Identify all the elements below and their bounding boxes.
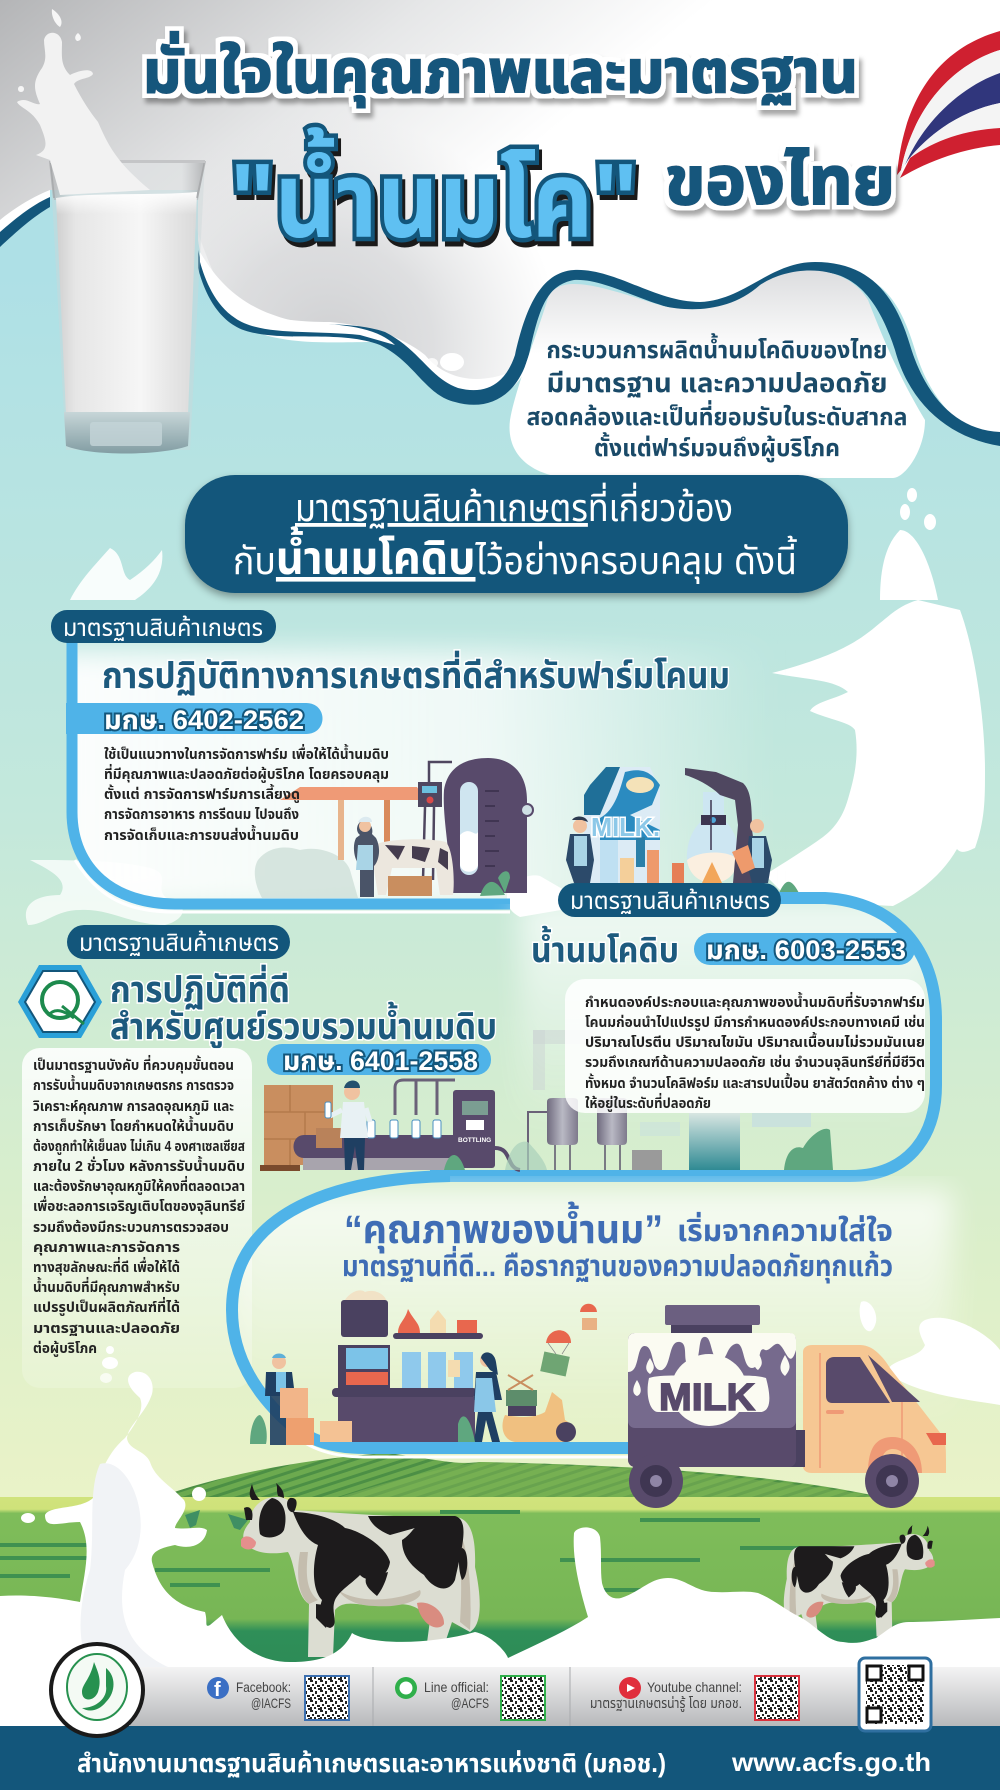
agency seal: [51, 1644, 143, 1736]
background wave: grey top area with white and teal swoosh: [0, 0, 1000, 446]
milk wave over field: [0, 1301, 1000, 1730]
standard code badge: มกษ. 6401-2558: [283, 1046, 478, 1076]
cow: small: [784, 1525, 935, 1637]
facebook contact: @IACFS: [251, 1695, 291, 1711]
description panel: คุณภาพและการจัดการ: [33, 1240, 180, 1256]
description panel: และต้องรักษาอุณหภูมิให้คงที่ตลอดเวลา: [33, 1175, 245, 1196]
heading: น้ำนมโคดิบ: [531, 925, 679, 970]
parachute parcels: [540, 1304, 597, 1376]
footer bar: [0, 1726, 1000, 1790]
agency name: สำนักงานมาตรฐานสินค้าเกษตรและอาหารแห่งชาติ (มกอช.): [77, 1748, 666, 1778]
description panel: มาตรฐานและปลอดภัย: [33, 1321, 180, 1337]
tank: [665, 1305, 760, 1325]
shop worker right: [458, 1352, 502, 1442]
plants: [250, 1415, 267, 1444]
milk splashes behind panels: [26, 488, 985, 925]
illustration: bottling line and plant: BOTTLING: [458, 1137, 491, 1144]
tag: มาตรฐานสินค้าเกษตร: [570, 888, 770, 915]
callout blob: [510, 271, 925, 478]
standard code badge: มกษ. 6402-2562: [104, 705, 304, 735]
illustration: farm and milking tank: MILK.: [591, 812, 660, 842]
description: [104, 743, 389, 844]
description: การจัดการอาหาร การรีดนม ไปจนถึง: [104, 807, 299, 823]
factory worker: [325, 1080, 370, 1170]
lab workers: [566, 816, 772, 883]
website: www.acfs.go.th: [731, 1747, 931, 1777]
description panel: raw milk: ปริมาณโปรตีน ปริมาณไขมัน ปริมาณเนื้อนมไม่รวมมันเนย: [585, 1031, 925, 1051]
description panel: raw milk: [565, 979, 925, 1113]
illustration: milk truck: MILK: [659, 1377, 756, 1419]
milk carton and lab: [584, 767, 660, 883]
illustration: bottling line and plant: [260, 1030, 833, 1171]
line contact: @ACFS: [451, 1695, 489, 1711]
shop worker left: [265, 1354, 352, 1445]
description panel: วิเคราะห์คุณภาพ การลดอุณหภูมิ และ: [33, 1099, 234, 1116]
description panel: raw milk: ทั้งหมด จำนวนโคลิฟอร์ม และสารปนเปื้อน ยาสัตว์ตกค้าง ต่าง ๆ: [585, 1072, 925, 1092]
panel 3: good practice for raw milk collection centres: [18, 925, 833, 1388]
callout text: กระบวนการผลิตน้ำนมโคดิบของไทย: [546, 333, 888, 364]
heading: การปฏิบัติทางการเกษตรที่ดีสำหรับฟาร์มโคนม: [102, 650, 730, 696]
delivery scooter: [502, 1375, 576, 1442]
cows: [241, 1483, 935, 1658]
tag: มาตรฐานสินค้าเกษตร: [63, 615, 263, 642]
title: [143, 31, 895, 260]
description panel: [22, 1048, 252, 1388]
description panel: ทางสุขลักษณะที่ดี เพื่อให้ได้: [33, 1256, 180, 1276]
footer contact strip: [130, 1667, 1000, 1726]
slogan: มาตรฐานที่ดี... คือรากฐานของความปลอดภัยทุกแก้ว: [342, 1245, 893, 1283]
illustration: milk shop: [250, 1290, 597, 1445]
icon: Q mark hexagon: [18, 965, 102, 1038]
distant cows: [185, 1510, 248, 1530]
description panel: การเก็บรักษา โดยกำหนดให้น้ำนมดิบ: [33, 1115, 234, 1135]
slogan: “คุณภาพของน้ำนม”: [344, 1201, 663, 1254]
standard code badge: มกษ. 6003-2553: [706, 935, 906, 965]
description panel: น้ำนมดิบที่มีคุณภาพสำหรับ: [33, 1276, 180, 1296]
facebook contact: Facebook:: [236, 1679, 291, 1695]
tag: มาตรฐานสินค้าเกษตร: [79, 930, 279, 957]
youtube contact: มาตรฐานเกษตรน่ารู้ โดย มกอช.: [590, 1695, 742, 1712]
line contact: [395, 1676, 545, 1720]
cow: large: [241, 1483, 480, 1658]
cab: [803, 1345, 946, 1473]
panel 1: good agricultural practice for dairy farms: [50, 610, 800, 912]
panel 2: raw cow milk standard: [430, 883, 940, 1176]
glass of milk: [17, 9, 205, 454]
title highlight: น้ำนมโค: "น้ำนมโค": [230, 127, 638, 260]
description panel: เพื่อชะลอการเจริญเติบโตของจุลินทรีย์: [33, 1195, 245, 1215]
plants: [480, 871, 800, 896]
illustration: farm and milking tank: [255, 758, 800, 898]
description panel: เป็นมาตรฐานบังคับ ที่ควบคุมขั้นตอน: [33, 1054, 234, 1074]
description panel: ต่อผู้บริโภค: [33, 1340, 97, 1358]
cow in the barn: [361, 839, 454, 895]
heading: [110, 964, 497, 1048]
callout text: สอดคล้องและเป็นที่ยอมรับในระดับสากล: [526, 400, 908, 431]
tanks and building fade: [533, 1030, 593, 1044]
description panel: แปรรูปเป็นผลิตภัณฑ์ที่ได้: [33, 1296, 180, 1317]
description: ที่มีคุณภาพและปลอดภัยต่อผู้บริโภค โดยครอบคลุม: [104, 763, 389, 784]
title line 2 end: ของไทย: ของไทย: [665, 143, 895, 219]
panel 4: quality slogan, shop and milk truck: [232, 1176, 952, 1508]
facebook contact: f: [214, 1679, 221, 1701]
description: ใช้เป็นแนวทางในการจัดการฟาร์ม เพื่อให้ได้น้ำนมดิบ: [104, 743, 389, 763]
callout text: [526, 333, 908, 463]
description panel: raw milk: รวมถึงเกณฑ์ด้านความปลอดภัย เช่น จำนวนจุลินทรีย์ที่มีชีวิต: [585, 1051, 925, 1071]
illustration: milk truck: [628, 1305, 946, 1508]
facebook contact: [207, 1676, 349, 1720]
title line 1: มั่นใจในคุณภาพและมาตรฐาน: [143, 31, 858, 108]
youtube contact: [590, 1676, 799, 1720]
heading pill: [185, 475, 848, 593]
flag ribbon: [897, 31, 1000, 178]
description panel: raw milk: โคนมก่อนนำไปแปรรูป มีการกำหนดองค์ประกอบทางเคมี เช่น: [585, 1014, 925, 1032]
line contact: Line official:: [424, 1679, 489, 1695]
description: ตั้งแต่ การจัดการฟาร์มการเลี้ยงดู: [104, 783, 300, 804]
farm worker: [354, 822, 379, 897]
description: การจัดเก็บและการขนส่งน้ำนมดิบ: [104, 824, 299, 844]
heading pill: มาตรฐานสินค้าเกษตรที่เกี่ยวข้อง: [295, 482, 733, 530]
milk splash: [17, 33, 150, 195]
landscape: hills and field: [0, 1453, 1000, 1700]
heading pill: กับน้ำนมโคดิบไว้อย่างครอบคลุม ดังนี้: [233, 526, 797, 584]
description panel: การรับน้ำนมดิบจากเกษตรกร การตรวจ: [33, 1074, 234, 1094]
slogan: [342, 1201, 893, 1283]
description panel: ภายใน 2 ชั่วโมง หลังการรับน้ำนมดิบ: [33, 1155, 245, 1175]
callout text: ตั้งแต่ฟาร์มจนถึงผู้บริโภค: [594, 432, 840, 463]
heading: การปฏิบัติที่ดี: [110, 964, 290, 1010]
main QR code: [859, 1658, 931, 1731]
description panel: raw milk: กำหนดองค์ประกอบและคุณภาพของน้ำนมดิบที่รับจากฟาร์ม: [585, 991, 925, 1011]
wheels: [629, 1454, 919, 1508]
description panel: รวมถึงต้องมีกระบวนการตรวจสอบ: [33, 1220, 229, 1236]
description panel: ต้องถูกทำให้เย็นลง ไม่เกิน 4 องศาเซลเซียส: [33, 1138, 245, 1156]
youtube contact: Youtube channel:: [647, 1679, 742, 1695]
slogan: เริ่มจากความใส่ใจ: [677, 1211, 893, 1248]
description panel: raw milk: ให้อยู่ในระดับที่ปลอดภัย: [585, 1092, 711, 1113]
callout text: มีมาตรฐาน และความปลอดภัย: [546, 368, 888, 398]
heading: สำหรับศูนย์รวบรวมน้ำนมดิบ: [110, 1001, 497, 1048]
